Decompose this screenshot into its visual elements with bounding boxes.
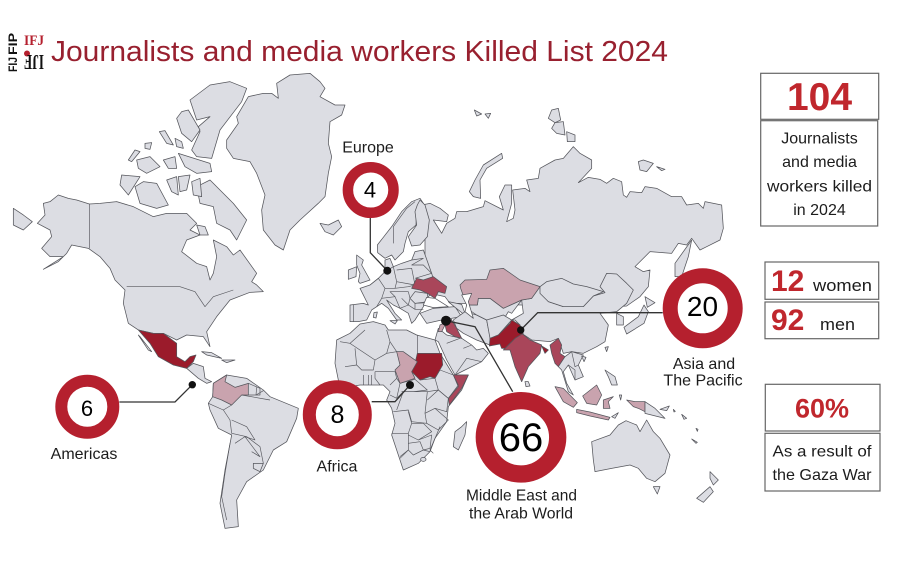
callout: Europe: 4 <box>364 178 376 202</box>
stat: 60 percent: As a result of <box>772 444 872 461</box>
stat: women and men: men <box>820 316 855 334</box>
logo: IFJ: FIP <box>8 33 20 55</box>
callout: Americas: 6 <box>81 396 93 421</box>
stat: 104 killed: 104 <box>787 76 852 119</box>
callout: Americas <box>51 381 196 463</box>
map: Indonesia and Oceania <box>555 370 718 502</box>
callout: Middle East and the Arab World: Middle East and <box>466 488 577 505</box>
stat: 104 killed: Journalists <box>781 130 858 148</box>
stat: 104 killed: and media <box>782 154 857 171</box>
map: Africa and Arabia <box>335 322 488 470</box>
world map <box>13 73 723 528</box>
callout: Middle East and the Arab World: 66 <box>499 416 543 460</box>
logo: IFJ <box>8 33 44 74</box>
stat: 60 percent <box>765 384 880 491</box>
callout: Middle East and the Arab World: the Arab World <box>469 505 573 522</box>
stat: women and men: 92 <box>771 304 804 337</box>
map: Europe <box>348 198 466 324</box>
stat: 60 percent: the Gaza War <box>772 467 872 484</box>
callout: Middle East and the Arab World <box>441 316 577 522</box>
logo: IFJ: FIJ <box>8 57 20 72</box>
callout: Asia and The Pacific <box>517 276 743 390</box>
stat: women and men: 12 <box>771 265 804 298</box>
callout: Asia and The Pacific: Asia and <box>673 356 735 373</box>
callout: Americas: Americas <box>51 446 117 463</box>
map: Russia <box>422 108 723 307</box>
stat: 104 killed: in 2024 <box>793 202 846 219</box>
callout: Europe <box>342 140 394 275</box>
callout: Africa <box>309 381 414 476</box>
stat: 104 killed <box>761 73 879 226</box>
map: South and East Asia <box>438 268 655 395</box>
stat: 104 killed: workers killed <box>766 178 872 196</box>
logo: IFJ: IJF <box>24 50 44 74</box>
map: Central and South America <box>138 330 298 528</box>
stat: 60 percent: 60% <box>795 394 849 424</box>
map: North America and Arctic <box>13 73 345 347</box>
title: Journalists and media workers Killed List 2024 <box>51 36 668 68</box>
stat: women and men: women <box>812 277 872 295</box>
callout: Asia and The Pacific: 20 <box>687 291 718 322</box>
callout: Africa: Africa <box>317 459 358 476</box>
callout: Asia and The Pacific: The Pacific <box>663 373 743 390</box>
logo: IFJ: IFJ <box>24 33 44 49</box>
callout: Europe: Europe <box>342 140 394 156</box>
stat: women and men <box>765 262 879 339</box>
callout: Africa: 8 <box>331 401 344 429</box>
